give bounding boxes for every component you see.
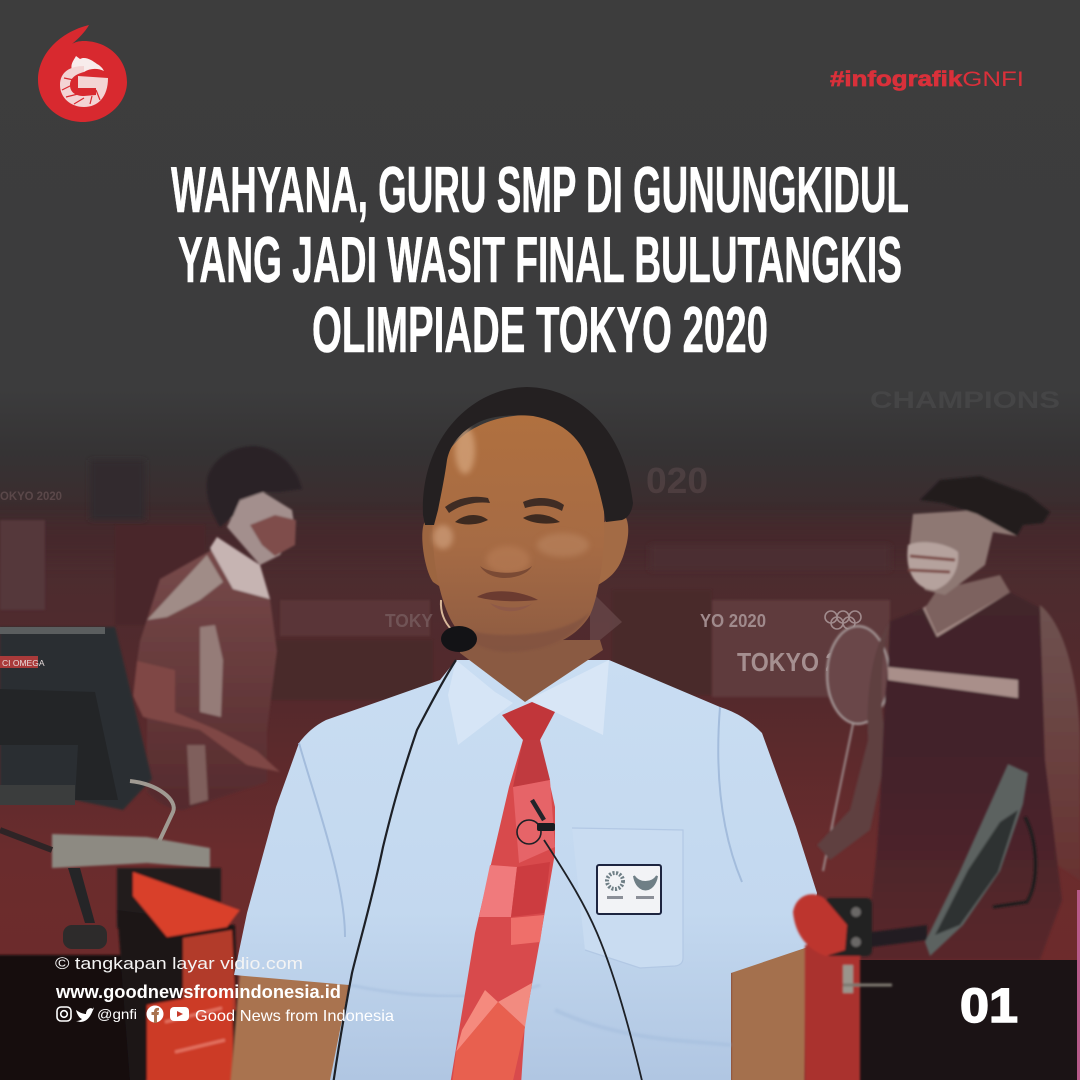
near arm bbox=[1035, 605, 1080, 880]
microphone wire bbox=[333, 660, 456, 1080]
photo credit: © tangkapan layar vidio.com bbox=[55, 955, 303, 973]
photo: right umpire chair and tablet bbox=[793, 764, 1035, 1080]
icon: Garuda G mark bbox=[60, 56, 108, 107]
title: OLIMPIADE TOKYO 2020 bbox=[312, 293, 768, 366]
title bbox=[171, 153, 909, 366]
face bbox=[432, 415, 604, 652]
microphone headset bbox=[441, 600, 452, 630]
photo: left umpire monitor bbox=[0, 627, 210, 949]
page number: 01 bbox=[960, 980, 1018, 1033]
icon: twitter bbox=[76, 1007, 94, 1022]
hashtag: #infografikGNFI: #infografik GNFI bbox=[830, 67, 1024, 91]
icon: youtube bbox=[170, 1007, 189, 1021]
lapel microphone and wire bbox=[517, 800, 643, 1080]
background: ghost arena text: 020 bbox=[646, 460, 708, 501]
photo: left player bbox=[133, 446, 302, 810]
background: arena court scene bbox=[0, 387, 1080, 700]
neck and face bbox=[227, 492, 295, 565]
logo: GNFI bbox=[38, 25, 127, 122]
hair bbox=[423, 387, 633, 525]
right forearm bbox=[731, 945, 808, 1080]
icon: facebook bbox=[146, 1006, 164, 1023]
jersey bbox=[137, 537, 277, 810]
bracket bbox=[825, 898, 872, 956]
mouth bbox=[477, 591, 538, 601]
social handles: @gnfi bbox=[97, 1006, 137, 1022]
cheek highlights bbox=[433, 525, 453, 549]
nose shadow bbox=[480, 566, 532, 578]
neck bbox=[925, 575, 1010, 634]
background: ghost arena text: YO 2020 bbox=[700, 611, 766, 631]
background: ghost arena text: OKYO 2020 bbox=[0, 489, 62, 503]
torso shirt bbox=[234, 660, 817, 1080]
neck bbox=[460, 640, 603, 702]
ears bbox=[422, 520, 445, 590]
icon: instagram bbox=[57, 1007, 71, 1021]
jersey bbox=[860, 592, 1062, 960]
background: ghost arena text bbox=[0, 387, 1060, 677]
far arm and hand bbox=[817, 622, 890, 860]
cable bbox=[130, 781, 174, 861]
eyebrows bbox=[445, 497, 490, 513]
social handles bbox=[57, 1006, 394, 1025]
mask bbox=[907, 542, 958, 590]
shirt folds and seams bbox=[299, 707, 742, 1045]
icon: Olympic rings on board bbox=[825, 611, 861, 629]
arm bbox=[133, 661, 280, 772]
collar bbox=[448, 660, 513, 745]
jaw shadow bbox=[455, 612, 590, 652]
head bbox=[422, 387, 633, 652]
metal support bar bbox=[52, 834, 210, 868]
collar bbox=[210, 537, 270, 599]
racket bbox=[823, 626, 889, 871]
photo: right player bbox=[817, 476, 1080, 960]
badge: Tokyo 2020 emblem bbox=[597, 865, 661, 914]
red post bbox=[805, 945, 860, 1080]
photo: referee Wahyana bbox=[230, 387, 817, 1080]
pocket bbox=[572, 828, 683, 968]
website URL: www.goodnewsfromindonesia.id bbox=[55, 982, 341, 1002]
photo: left red chair arm bbox=[0, 868, 240, 1080]
background: ghost arena text: CHAMPIONS bbox=[870, 387, 1060, 414]
social handles: Good News from Indonesia bbox=[195, 1008, 394, 1025]
headband bbox=[920, 476, 1050, 536]
background: ghost arena text: TOKYO 2020 bbox=[737, 647, 877, 677]
head bbox=[908, 510, 1017, 595]
hair bbox=[207, 446, 302, 527]
photo: bottom right dark block bbox=[855, 890, 1080, 1080]
mask bbox=[250, 515, 296, 556]
tie bbox=[450, 702, 555, 1080]
background: sponsor boards bbox=[268, 590, 890, 700]
eyes bbox=[455, 515, 488, 524]
background: ghost arena text: TOKY bbox=[385, 611, 433, 631]
left forearm bbox=[230, 972, 349, 1080]
forehead highlight bbox=[455, 426, 475, 474]
tablet bbox=[925, 764, 1028, 956]
photo: left umpire monitor: CI OMEGA bbox=[2, 658, 45, 668]
